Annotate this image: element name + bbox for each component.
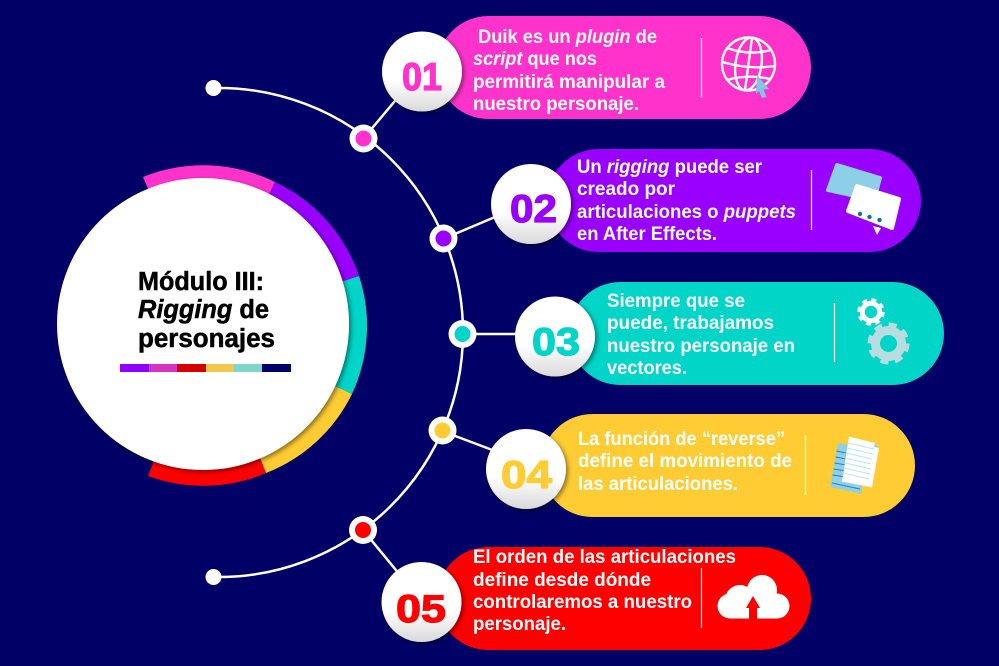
text 02 [577,157,796,245]
item 03 [448,282,944,385]
text 01 [473,27,665,115]
text 01: script que nos [473,49,597,70]
central module circle [57,165,367,486]
text 01: Duik es un plugin de [478,27,657,48]
text 03: nuestro personaje en [607,336,795,357]
text 04 [578,429,792,495]
segmented colour ring [143,165,367,486]
icon: globe with cursor [722,36,775,98]
icon: cloud upload [718,575,790,619]
text 03: vectores. [607,358,687,379]
pill 03 [569,282,944,385]
number badge 05 [382,562,462,642]
text 05: personaje. [473,614,566,635]
connector 04 [442,431,495,451]
text 04: las articulaciones. [578,474,738,495]
text 03: puede, trabajamos [607,313,774,334]
item 02 [430,149,921,252]
text 05 [473,547,736,635]
number badge 04: 04 [501,454,552,497]
text 05: El orden de las articulaciones [473,547,736,568]
pill 05 [437,547,811,650]
colour bar [120,364,291,372]
number badge 02 [491,164,571,244]
text 01: permitirá manipular a [473,72,665,93]
text 05: controlaremos a nuestro [473,592,692,613]
text 02: articulaciones o puppets [577,202,796,223]
title: Módulo III: [138,268,264,296]
node 03 [448,320,476,348]
node 01 [350,124,378,152]
connector 03 [463,333,520,335]
node 02 [430,224,458,252]
item 04 [428,414,915,517]
number badge 01 [382,32,462,112]
item 01 [350,16,811,152]
text 04: define el movimiento de [578,451,792,472]
connector 02 [443,217,495,239]
text 05: define desde dónde [473,570,651,591]
number badge 04 [486,429,566,509]
text 02: creado por [577,179,676,200]
number badge 02: 02 [510,188,557,231]
number badge 03 [515,296,595,376]
title [138,268,275,353]
connector 01 [363,95,400,139]
connector 05 [363,530,400,575]
item 05 [349,516,811,650]
number badge 03: 03 [532,321,580,364]
text 02: en After Effects. [577,224,717,245]
white disc [57,178,349,470]
number badge 05: 05 [396,588,446,631]
text 03: Siempre que se [607,291,745,312]
icon: chat bubbles [828,165,899,235]
pill 02 [547,149,921,252]
icon: gears [860,302,906,361]
node 05 [349,516,377,544]
text 01: nuestro personaje. [473,94,639,115]
pill 04 [541,414,915,517]
title: personajes [138,325,275,353]
text 03 [607,291,795,379]
text 02: Un rigging puede ser [577,157,763,178]
timeline arc [206,80,463,585]
pill 01 [437,16,811,119]
node 04 [428,416,456,444]
title: Rigging de [138,296,269,324]
text 04: La función de “reverse” [578,429,785,450]
number badge 01: 01 [402,56,442,99]
icon: documents [830,436,879,494]
